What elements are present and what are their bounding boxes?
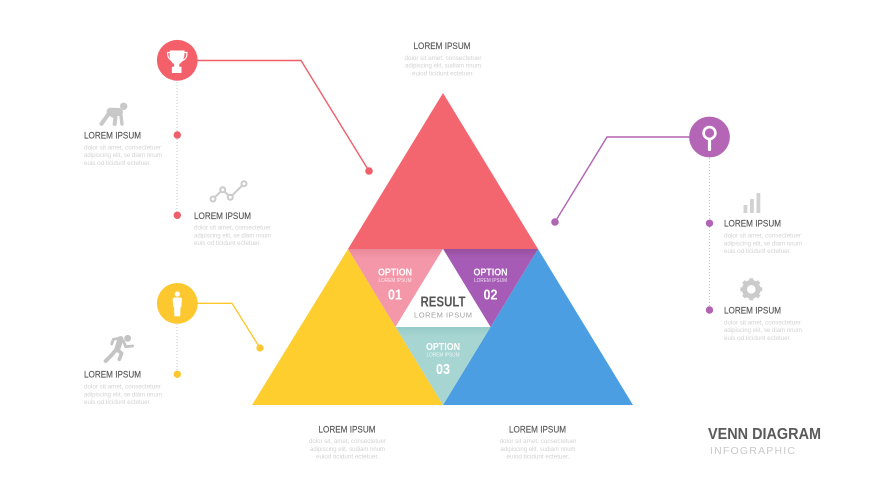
yellow connector (197, 303, 260, 348)
icon: trophy badge (157, 40, 198, 81)
text: bottom right label: LOREM IPSUM (509, 424, 566, 434)
text: bottom right label: dolor sit amet, consectetuer (500, 438, 577, 445)
text: left item 3: euis od ticidunt ectetuer. (84, 399, 151, 406)
red connector (197, 60, 369, 171)
text: right item 2: LOREM IPSUM (724, 306, 781, 316)
text: bottom left label (309, 424, 387, 460)
option 03 overlap: LOREM IPSUM (426, 352, 460, 358)
option 03 overlap: 03 (436, 361, 450, 378)
text: right item 1: LOREM IPSUM (724, 218, 781, 228)
option 01 overlap: 01 (388, 286, 402, 304)
option 01 overlap (348, 249, 443, 327)
text: right item 1: dolor sit amet, consectetuer (724, 232, 802, 240)
top label: euiod ticidunt ectetuer. (412, 70, 474, 78)
text: bottom left label: dolor sit, amet, consectetuer (309, 438, 387, 445)
option 02 overlap: LOREM IPSUM (474, 278, 507, 284)
icon: sprinting runner (106, 335, 133, 361)
text: left item 1: LOREM IPSUM (84, 130, 141, 140)
blue right triangle (443, 249, 633, 405)
venn triangle diagram (252, 93, 633, 405)
text: left item 3: dolor sit amet, consectetuer (84, 384, 162, 390)
top label (404, 41, 482, 78)
option 02 overlap: OPTION (474, 268, 508, 278)
text: bottom right label (500, 424, 577, 460)
text: left item 3: LOREM IPSUM (84, 369, 141, 379)
text: bottom right label: euiod ticidunt ectetuer. (506, 454, 570, 460)
text: right item 1: adipiscing elit, se diam nnum (724, 240, 802, 247)
title block: VENN DIAGRAM (708, 426, 821, 443)
purple connector (555, 137, 690, 222)
text: right item 2: euis od ticidunt ectetuer. (724, 335, 791, 342)
text: left item 3 (84, 369, 162, 406)
result center (396, 249, 490, 327)
text: left item 2 (194, 211, 272, 247)
icon: line chart (210, 181, 246, 202)
text: right item 1: euis od ticidunt ectetuer. (724, 248, 791, 255)
text: bottom left label: LOREM IPSUM (318, 424, 376, 434)
result center: LOREM IPSUM (414, 311, 472, 320)
top label: adipiscing elit, sudiam nnum (405, 62, 481, 70)
text: left item 2: adipiscing elit, se diam nnum (194, 232, 271, 239)
text: bottom right label: adipiscing elit, sudiam nnum (500, 446, 576, 453)
text: bottom left label: euiod ticidunt ectetuer. (316, 454, 379, 460)
text: left item 3: adipiscing elit, se diam nnum (84, 391, 162, 398)
title block (708, 426, 821, 457)
top label: LOREM IPSUM (414, 41, 470, 51)
text: right item 1 (724, 218, 802, 255)
icon: magnifier badge (689, 117, 730, 157)
text: left item 1: dolor sit amet, consectetuer (84, 144, 162, 151)
text: left item 1 (84, 130, 162, 167)
option 01 overlap: OPTION (378, 268, 412, 278)
result center: RESULT (420, 294, 466, 310)
icon: crouching runner (102, 103, 127, 124)
text: right item 2: dolor sit amet, consectetuer (724, 319, 802, 326)
text: left item 1: euis od ticidunt ectetuer. (84, 160, 151, 167)
text: left item 2: euis od ticidunt ectetuer. (194, 240, 261, 247)
yellow timeline (157, 283, 264, 378)
title block: INFOGRAPHIC (710, 445, 795, 457)
yellow left triangle (252, 249, 443, 405)
text: bottom left label: adipiscing elit, sudiam nnum (310, 446, 385, 453)
option 03 overlap: OPTION (426, 342, 460, 353)
red top triangle (348, 93, 538, 249)
text: left item 2: dolor sit amet, consectetuer (194, 224, 272, 232)
text: right item 2: adipiscing elit, se diam nnum (724, 327, 802, 334)
text: left item 2: LOREM IPSUM (194, 211, 251, 221)
red timeline (157, 40, 373, 219)
icon: person badge (157, 283, 198, 324)
option 03 overlap (396, 327, 490, 405)
icon: gear (740, 278, 762, 300)
purple timeline (551, 117, 730, 314)
text: right item 2 (724, 306, 802, 342)
option 02 overlap: 02 (484, 286, 498, 304)
text: left item 1: adipiscing elit, se diam nnum (84, 152, 162, 159)
icon: bar chart (744, 193, 760, 213)
option 01 overlap: LOREM IPSUM (378, 278, 412, 284)
top label: dolor sit amet, consectetuer (404, 55, 482, 62)
option 02 overlap (443, 249, 538, 327)
